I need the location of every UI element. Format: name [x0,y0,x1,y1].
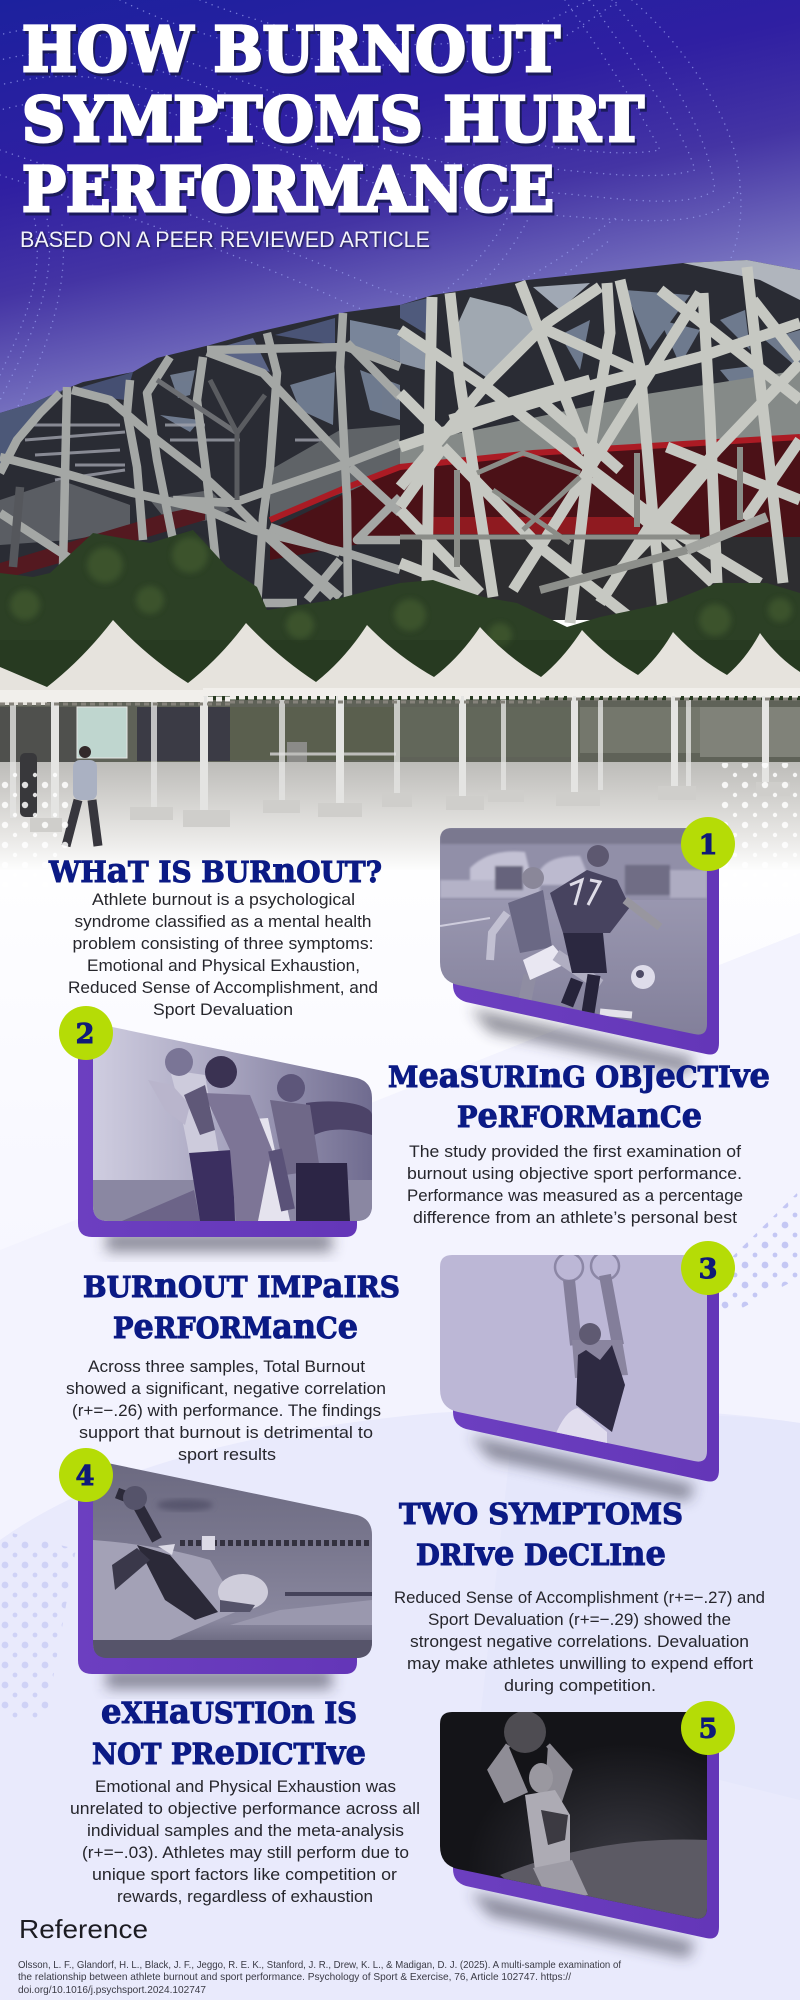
photo: swimmer [93,1460,373,1660]
stadium and plaza photo [0,260,800,870]
card 3: gymnast photo [440,1241,735,1501]
text: measuring objective performance: burnout using objective sport performance. [407,1164,742,1183]
buildings and foliage below tents [0,700,800,767]
number badge 4 [59,1448,113,1502]
tent post bases [30,782,790,832]
header sky background [0,0,800,480]
text: what is burnout: Reduced Sense of Accomplishment, and [68,978,378,997]
subtitle: BASED ON A PEER REVIEWED ARTICLE [20,227,430,252]
text: what is burnout: syndrome classified as a mental health [74,912,371,931]
stadium secondary trusses [400,447,767,590]
heading: two symptoms drive decline [399,1497,683,1574]
decorative dot clusters [0,1190,800,1720]
text: measuring objective performance [407,1142,743,1227]
heading: burnout impairs performance: PeRFORManCe [113,1307,358,1347]
text: exhaustion is not predictive: unique sport factors like competition or [92,1865,397,1884]
person in background [20,753,37,817]
text: burnout impairs performance: support that burnout is detrimental to [79,1423,373,1442]
heading: exhaustion is not predictive: eXHaUSTIOn IS [101,1692,357,1732]
text: measuring objective performance: Performance was measured as a percentage [407,1186,743,1205]
plaza ground [0,762,800,870]
text: measuring objective performance: The study provided the first examination of [409,1142,741,1161]
text: what is burnout: Emotional and Physical Exhaustion, [87,956,360,975]
white tents [0,620,800,705]
text: burnout impairs performance: Across three samples, Total Burnout [88,1357,365,1376]
heading: measuring objective performance: MeaSURInG OBJeCTIve [388,1056,770,1096]
dotted wave pattern in sky [0,0,741,430]
number badge 2: 2 [76,1019,94,1050]
number badge 1 [681,817,735,871]
number badge 1: 1 [699,830,717,861]
number badge 3 [681,1241,735,1295]
stadium steel lattice: right side [400,267,800,623]
text: what is burnout: problem consisting of three symptoms: [72,934,373,953]
photo: gymnast on rings [440,1252,707,1465]
photo: basketball player [440,1711,707,1925]
text: burnout impairs performance: showed a significant, negative correlation [66,1379,386,1398]
number badge 4: 4 [76,1461,94,1492]
text: two symptoms drive decline: Reduced Sense of Accomplishment (r+=−.27) and [394,1588,765,1607]
text: measuring objective performance: difference from an athlete’s personal best [413,1208,737,1227]
card 1: soccer photo [440,817,735,1074]
poster stand [77,707,127,758]
heading: exhaustion is not predictive: NOT PReDICTIve [92,1733,366,1773]
number badge 5: 5 [699,1714,717,1745]
card 4: swimmer photo [59,1448,373,1689]
number badge 2 [59,1006,113,1060]
title: HOW BURNOUT [22,13,560,86]
text: burnout impairs performance: sport results [178,1445,276,1464]
photo: soccer players [440,828,707,1038]
text: burnout impairs performance: (r+=−.26) with performance. The findings [72,1401,381,1420]
text: exhaustion is not predictive: rewards, regardless of exhaustion [117,1887,373,1906]
text: burnout impairs performance [66,1357,386,1464]
citation: doi.org/10.1016/j.psychsport.2024.102747 [18,1984,206,1996]
page background [0,820,800,2000]
heading: two symptoms drive decline: DRIve DeCLIne [416,1534,666,1574]
stadium body [0,260,800,620]
heading: measuring objective performance [388,1056,770,1136]
photo: sprinters [93,1020,373,1222]
number badge 3: 3 [699,1254,717,1285]
text: exhaustion is not predictive: (r+=−.03). Athletes may still perform due to [82,1843,409,1862]
text: exhaustion is not predictive: Emotional and Physical Exhaustion was [95,1777,396,1796]
text: what is burnout [68,890,378,1019]
text: two symptoms drive decline: strongest negative correlations. Devaluation [410,1632,749,1651]
text: two symptoms drive decline: Sport Devaluation (r+=−.29) showed the [428,1610,731,1629]
citation: the relationship between athlete burnout and sport performance. Psychology of Sport & Exercise, 76, Article 102747. https:// [18,1971,571,1983]
heading: what is burnout: WHaT IS BURnOUT? [48,851,382,891]
title: SYMPTOMS HURT [22,83,644,156]
heading: burnout impairs performance: BURnOUT IMPaIRS [83,1266,400,1306]
card 2: sprinters photo [59,1006,373,1252]
text: two symptoms drive decline: during competition. [504,1676,656,1695]
walking person [66,746,98,846]
text: exhaustion is not predictive: unrelated to objective performance across all [70,1799,420,1818]
trees [0,530,800,710]
citation [18,1959,621,1996]
text: exhaustion is not predictive: individual samples and the meta-analysis [87,1821,404,1840]
white dot clusters on plaza [0,763,800,887]
tent posts [10,695,769,830]
number badge 5 [681,1701,735,1755]
text: two symptoms drive decline: may make athletes unwilling to expend effort [407,1654,753,1673]
heading: exhaustion is not predictive [92,1692,366,1773]
text: what is burnout: Athlete burnout is a psychological [92,890,355,909]
heading: burnout impairs performance [83,1266,400,1347]
text: exhaustion is not predictive [70,1777,420,1906]
heading: two symptoms drive decline: TWO SYMPTOMS [399,1497,683,1531]
text: what is burnout: Sport Devaluation [153,1000,293,1019]
text: two symptoms drive decline [394,1588,765,1695]
stadium steel lattice: left side [0,313,400,607]
card 5: basketball photo [440,1701,735,1958]
reference heading: Reference [19,1914,148,1944]
heading: measuring objective performance: PeRFORManCe [457,1096,702,1136]
title [22,13,644,226]
title: PERFORMANCE [22,153,554,226]
citation: Olsson, L. F., Glandorf, H. L., Black, J. F., Jeggo, R. E. K., Stanford, J. R., Drew, K. L., & Madigan, D. J. (2025). A multi-sample examination of [18,1959,621,1971]
